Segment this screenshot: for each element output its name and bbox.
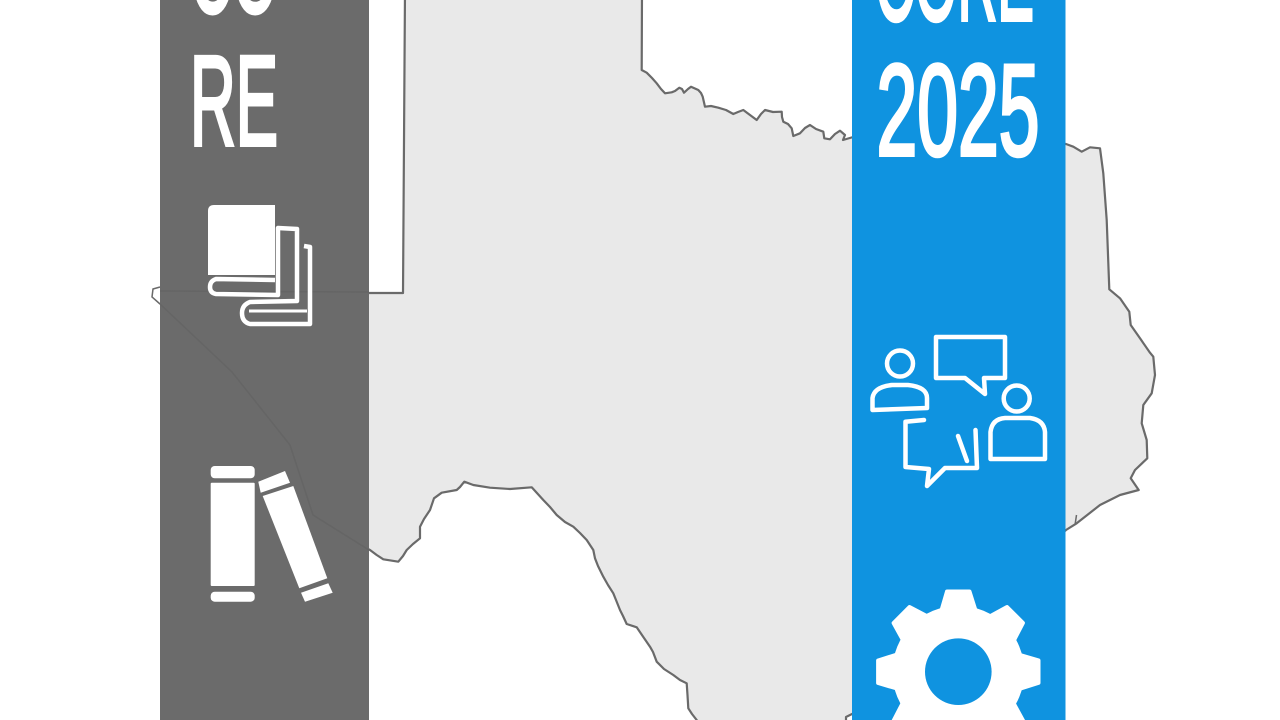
panel: blue column [852, 0, 1066, 720]
map: Texas outline [152, 0, 1155, 720]
panel: grey column: RE [190, 30, 278, 173]
icon: gear [878, 592, 1038, 720]
icon: stacked books [208, 205, 310, 324]
heading: blue column text [875, 0, 1040, 183]
panel: grey column [160, 0, 369, 720]
heading: blue column text: 2025 [876, 37, 1040, 183]
heading: grey column text [190, 0, 278, 173]
icon: people in conversation [872, 337, 1045, 486]
icon: leaning books [211, 466, 333, 602]
